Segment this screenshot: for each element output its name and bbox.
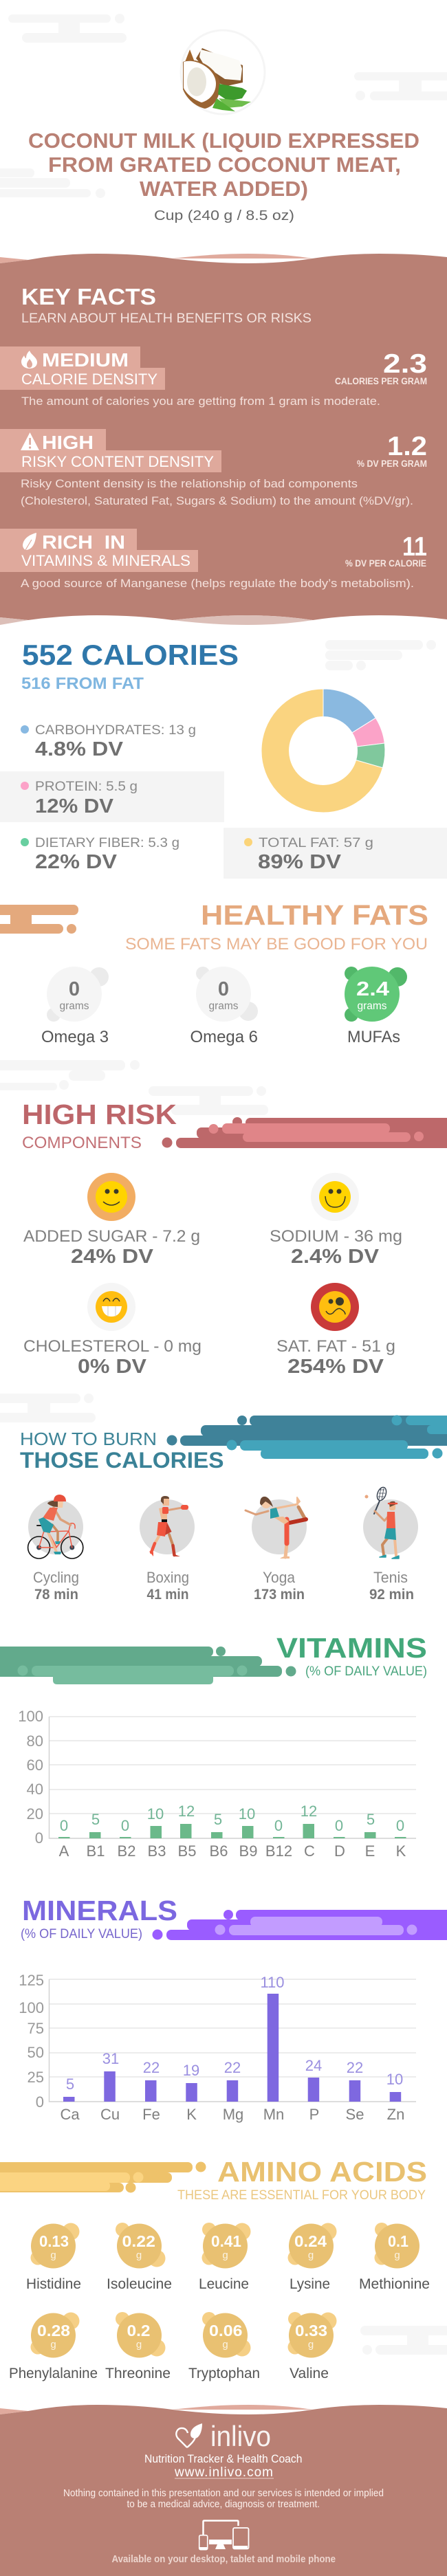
donut chart <box>261 689 385 813</box>
bar chart: vitamins: 0 <box>274 1817 283 1834</box>
subheading: components: COMPONENTS <box>22 1134 142 1152</box>
bar chart: vitamins: B3 <box>148 1842 166 1860</box>
stat: lysine: 0.24 <box>294 2232 327 2250</box>
fact: risky content density: % DV PER GRAM <box>357 459 427 469</box>
stat: MUFAs: 2.4 <box>356 978 389 1000</box>
bar chart: minerals: 0 <box>36 2093 44 2111</box>
bar chart: minerals: Mg <box>223 2106 243 2123</box>
bar chart: vitamins: B1 <box>87 1842 105 1860</box>
legend: dietary fiber <box>21 836 179 873</box>
item: added sugar: 24% DV <box>71 1246 154 1268</box>
legend: carbohydrates: CARBOHYDRATES: 13 g <box>35 723 196 738</box>
stat: methionine <box>359 2223 430 2292</box>
stat: phenylalanine <box>9 2313 98 2381</box>
item: cholesterol: CHOLESTEROL - 0 mg <box>23 1337 201 1356</box>
icon: coconut in circle <box>181 30 265 114</box>
heading: vitamins: VITAMINS <box>276 1632 427 1664</box>
stat: leucine <box>199 2223 250 2292</box>
bar chart: minerals: Cu <box>100 2106 120 2123</box>
stat: omega 3 <box>41 967 109 1046</box>
panel: minerals <box>19 1895 447 2123</box>
stat: omega 6: grams <box>208 1000 239 1012</box>
decoration: green pills <box>0 1647 296 1684</box>
legend: protein <box>0 771 224 822</box>
fact: rich in vitamins and minerals: % DV PER CALORIE <box>345 558 426 569</box>
header: food image and title <box>28 30 419 223</box>
item: saturated fat: 254% DV <box>287 1356 384 1378</box>
bar chart: vitamins: B9 <box>239 1842 257 1860</box>
activity: cycling: 78 min <box>34 1587 78 1603</box>
decoration: purple pills <box>153 1910 447 1940</box>
title <box>28 129 419 201</box>
bar chart: vitamins: B6 <box>210 1842 228 1860</box>
bar chart: vitamins: 40 <box>27 1781 43 1798</box>
bar chart: minerals: 22 <box>224 2059 241 2076</box>
serving size: Cup (240 g / 8.5 oz) <box>154 208 294 223</box>
bar chart: vitamins: K <box>396 1842 406 1860</box>
item: added sugar <box>23 1173 200 1268</box>
icon: yoga pose <box>246 1497 306 1559</box>
fact: risky content density <box>0 429 427 507</box>
disclaimer <box>63 2488 384 2510</box>
icon: devices <box>199 2520 249 2550</box>
stat: tryptophan: 0.06 <box>209 2322 242 2340</box>
bar chart: vitamins: B5 <box>178 1842 196 1860</box>
activity: cycling: Cycling <box>33 1569 79 1586</box>
icon: warning triangle <box>21 432 39 450</box>
stat: valine: g <box>308 2339 314 2351</box>
bar chart: minerals: 110 <box>260 1974 285 1991</box>
legend: dietary fiber: DIETARY FIBER: 5.3 g <box>35 836 179 850</box>
activity: tennis: Tenis <box>373 1569 408 1586</box>
bar chart: vitamins: A <box>59 1842 69 1860</box>
stat: lysine: g <box>308 2249 314 2261</box>
heading: healthy fats: HEALTHY FATS <box>201 899 428 931</box>
bar chart: minerals: 19 <box>183 2062 199 2079</box>
bar chart: vitamins: 10 <box>239 1805 255 1823</box>
stat: valine: 0.33 <box>295 2322 327 2340</box>
stat: leucine: Leucine <box>199 2276 249 2292</box>
tagline: Nutrition Tracker & Health Coach <box>144 2452 303 2465</box>
bar chart: minerals: 25 <box>28 2069 44 2086</box>
icon: cyclist <box>28 1495 83 1559</box>
decoration: red pills <box>162 1117 447 1148</box>
subheading: from fat: 516 FROM FAT <box>21 674 144 693</box>
stat: valine <box>287 2312 337 2381</box>
bar chart: vitamins: D <box>334 1842 345 1860</box>
decoration: yellow pills <box>0 2161 206 2193</box>
stat: tryptophan: Tryptophan <box>188 2366 260 2381</box>
stat: phenylalanine: g <box>50 2339 56 2351</box>
stat: threonine: 0.2 <box>127 2322 150 2340</box>
bar chart: vitamins: 0 <box>396 1817 404 1834</box>
bar chart: vitamins: 0 <box>121 1817 129 1834</box>
bar chart: minerals: Mn <box>263 2106 284 2123</box>
bar chart: vitamins: 100 <box>18 1708 43 1725</box>
panel: vitamins <box>0 1632 427 1860</box>
panel: footer <box>0 2405 447 2576</box>
availability note: Available on your desktop, tablet and mobile phone <box>111 2553 336 2565</box>
heading: calories: 552 CALORIES <box>22 639 239 671</box>
activity: boxing <box>140 1496 195 1603</box>
heading: high risk: HIGH RISK <box>22 1099 177 1130</box>
bar chart: vitamins: 0 <box>60 1817 68 1834</box>
heading: key facts: KEY FACTS <box>21 284 156 309</box>
stat: threonine <box>105 2312 171 2381</box>
icon: grin <box>96 1291 127 1323</box>
bar chart: minerals: 31 <box>102 2050 119 2067</box>
activity: yoga: 173 min <box>254 1587 305 1603</box>
stat: methionine: g <box>394 2249 400 2261</box>
activity: tennis <box>363 1486 418 1603</box>
icon: boxer <box>149 1496 188 1556</box>
item: cholesterol <box>23 1283 201 1378</box>
heading: minerals: MINERALS <box>22 1895 177 1926</box>
stat: leucine: g <box>222 2249 228 2261</box>
bar chart: minerals: Ca <box>60 2106 80 2123</box>
stat: phenylalanine: 0.28 <box>37 2322 70 2340</box>
bar chart: vitamins: 80 <box>27 1732 43 1750</box>
stat: MUFAs <box>345 967 407 1046</box>
item: sodium <box>270 1173 402 1268</box>
activity: cycling <box>28 1495 83 1603</box>
stat: leucine: 0.41 <box>211 2232 241 2250</box>
stat: omega 3: Omega 3 <box>41 1028 109 1046</box>
activity: boxing: 41 min <box>147 1587 188 1603</box>
bar chart: minerals: 24 <box>305 2057 322 2074</box>
bar chart: vitamins: E <box>365 1842 375 1860</box>
stat: histidine: Histidine <box>26 2276 81 2292</box>
activity: boxing: Boxing <box>146 1569 189 1586</box>
bar chart: vitamins: 0 <box>335 1817 343 1834</box>
legend: protein: 12% DV <box>35 795 114 817</box>
stat: isoleucine: g <box>136 2249 142 2261</box>
stat: omega 6 <box>190 967 258 1046</box>
disclaimer: Nothing contained in this presentation and our services is intended or implied <box>63 2488 384 2499</box>
subheading: percent daily value: (% OF DAILY VALUE) <box>305 1664 427 1679</box>
panel: healthy fats <box>0 899 428 1046</box>
stat: valine: Valine <box>290 2366 329 2381</box>
stat: lysine: Lysine <box>290 2276 330 2292</box>
legend: total fat: 89% DV <box>258 851 342 873</box>
legend: carbohydrates: 4.8% DV <box>35 738 124 760</box>
stat: lysine <box>287 2223 337 2292</box>
fact: risky content density: RISKY CONTENT DENSITY <box>21 453 214 470</box>
item: added sugar: ADDED SUGAR - 7.2 g <box>23 1227 200 1246</box>
icon: leaf <box>23 533 36 550</box>
fact: calorie density: 2.3 <box>383 349 427 379</box>
bar chart: minerals: 75 <box>28 2020 44 2037</box>
website link: www.inlivo.com <box>174 2465 273 2480</box>
bar chart: minerals: Se <box>346 2106 364 2123</box>
legend: total fat: TOTAL FAT: 57 g <box>259 836 373 850</box>
stat: omega 3: 0 <box>69 978 80 1000</box>
bar chart: vitamins: 5 <box>367 1811 375 1828</box>
icon: tennis player <box>364 1486 399 1559</box>
fact: risky content density: HIGH <box>42 432 94 453</box>
bar chart: minerals: Fe <box>142 2106 160 2123</box>
icon: worried face <box>319 1291 351 1323</box>
fact: calorie density: CALORIE DENSITY <box>21 371 157 388</box>
logo: inlivo <box>176 2420 271 2452</box>
bar chart: minerals <box>19 1972 416 2123</box>
stat: threonine: g <box>136 2339 142 2351</box>
bar chart: minerals: K <box>186 2106 197 2123</box>
item: sodium: 2.4% DV <box>291 1246 380 1268</box>
bar chart: vitamins: B2 <box>118 1842 135 1860</box>
title: FROM GRATED COCONUT MEAT, <box>48 153 401 177</box>
activity: yoga: Yoga <box>263 1569 296 1586</box>
fact: rich in vitamins and minerals: 11 <box>402 532 427 562</box>
fact: risky content density: (Cholesterol, Saturated Fat, Sugars & Sodium) to the amount (%DV/gr). <box>21 495 413 507</box>
item: sodium: SODIUM - 36 mg <box>270 1227 402 1246</box>
bar chart: minerals: P <box>309 2106 319 2123</box>
title: WATER ADDED) <box>140 177 308 201</box>
fact: calorie density: MEDIUM <box>42 349 129 371</box>
bar chart: vitamins: C <box>304 1842 315 1860</box>
subheading: SOME FATS MAY BE GOOD FOR YOU <box>125 935 428 954</box>
stat: methionine: 0.1 <box>388 2232 408 2250</box>
icon: flame <box>21 351 37 368</box>
stat: tryptophan: g <box>222 2339 228 2351</box>
title: COCONUT MILK (LIQUID EXPRESSED <box>28 129 419 153</box>
disclaimer: to be a medical advice, diagnosis or treatment. <box>127 2499 320 2510</box>
decoration: teal pills <box>166 1415 447 1459</box>
bar chart: minerals: 100 <box>19 1999 44 2016</box>
bar chart: vitamins: 20 <box>27 1805 43 1823</box>
fact: risky content density: Risky Content density is the relationship of bad components <box>21 478 358 490</box>
stat: isoleucine <box>107 2223 172 2292</box>
subheading: percent daily value: (% OF DAILY VALUE) <box>21 1927 142 1941</box>
bar chart: vitamins: 12 <box>301 1803 317 1820</box>
panel: how to burn those calories <box>20 1415 447 1603</box>
fact: calorie density <box>0 346 427 408</box>
bar chart: minerals: Zn <box>387 2106 404 2123</box>
legend: carbohydrates <box>21 723 196 760</box>
item: saturated fat <box>276 1283 395 1378</box>
logo: inlivo: inlivo <box>210 2420 271 2452</box>
bar chart: minerals: 22 <box>143 2059 160 2076</box>
bar chart: minerals: 22 <box>347 2059 363 2076</box>
fact: rich in vitamins and minerals: A good source of Manganese (helps regulate the body’s metabolism). <box>21 577 414 590</box>
bar chart: minerals: 50 <box>28 2044 44 2061</box>
bar chart: vitamins: 12 <box>178 1803 195 1820</box>
panel: calories <box>0 639 447 879</box>
bar chart: vitamins: 60 <box>27 1757 43 1774</box>
stat: MUFAs: grams <box>357 1000 387 1012</box>
subheading: LEARN ABOUT HEALTH BENEFITS OR RISKS <box>21 311 312 326</box>
bar chart: vitamins <box>18 1708 416 1860</box>
heading: how to burn: HOW TO BURN <box>20 1429 157 1449</box>
stat: omega 3: grams <box>59 1000 89 1012</box>
stat: MUFAs: MUFAs <box>347 1028 400 1046</box>
stat: phenylalanine: Phenylalanine <box>9 2366 98 2381</box>
bar chart: minerals: 10 <box>386 2071 403 2088</box>
stat: tryptophan <box>188 2312 260 2381</box>
legend: total fat <box>224 828 447 879</box>
fact: risky content density: 1.2 <box>387 432 427 461</box>
bar chart: vitamins: B12 <box>265 1842 292 1860</box>
fact: rich in vitamins and minerals: RICH IN <box>42 531 125 553</box>
icon: big smile <box>319 1181 351 1213</box>
item: cholesterol: 0% DV <box>78 1356 147 1378</box>
bar chart: minerals: 5 <box>66 2076 74 2093</box>
stat: omega 6: Omega 6 <box>190 1028 258 1046</box>
subheading: THESE ARE ESSENTIAL FOR YOUR BODY <box>177 2188 426 2203</box>
stat: isoleucine: Isoleucine <box>107 2276 172 2292</box>
item: saturated fat: SAT. FAT - 51 g <box>276 1337 395 1356</box>
icon: slight smile <box>96 1181 127 1213</box>
legend: dietary fiber: 22% DV <box>35 851 118 873</box>
stat: histidine: g <box>50 2249 56 2261</box>
fact: calorie density: CALORIES PER GRAM <box>335 376 427 386</box>
panel: key facts <box>0 254 447 625</box>
panel: amino acids <box>0 2156 430 2381</box>
heading: amino acids: AMINO ACIDS <box>217 2156 427 2188</box>
bar chart: vitamins: 0 <box>35 1829 43 1847</box>
stat: isoleucine: 0.22 <box>122 2232 155 2250</box>
bar chart: minerals: 125 <box>19 1972 44 1989</box>
bar chart: vitamins: 5 <box>214 1811 222 1828</box>
bar chart: vitamins: 10 <box>147 1805 164 1823</box>
stat: histidine <box>26 2223 81 2292</box>
fact: rich in vitamins and minerals <box>0 529 427 590</box>
decoration: orange pills <box>0 905 78 934</box>
stat: threonine: Threonine <box>105 2366 171 2381</box>
panel: high risk components <box>22 1099 447 1378</box>
activity: yoga <box>246 1497 307 1603</box>
stat: methionine: Methionine <box>359 2276 430 2292</box>
stat: omega 6: 0 <box>218 978 229 1000</box>
heading: those calories: THOSE CALORIES <box>20 1448 224 1473</box>
bar chart: vitamins: 5 <box>91 1811 100 1828</box>
legend: protein: PROTEIN: 5.5 g <box>35 780 138 794</box>
fact: rich in vitamins and minerals: VITAMINS & MINERALS <box>21 552 190 569</box>
stat: histidine: 0.13 <box>39 2232 69 2250</box>
fact: calorie density: The amount of calories you are getting from 1 gram is moderate. <box>21 395 380 408</box>
activity: tennis: 92 min <box>369 1587 414 1603</box>
